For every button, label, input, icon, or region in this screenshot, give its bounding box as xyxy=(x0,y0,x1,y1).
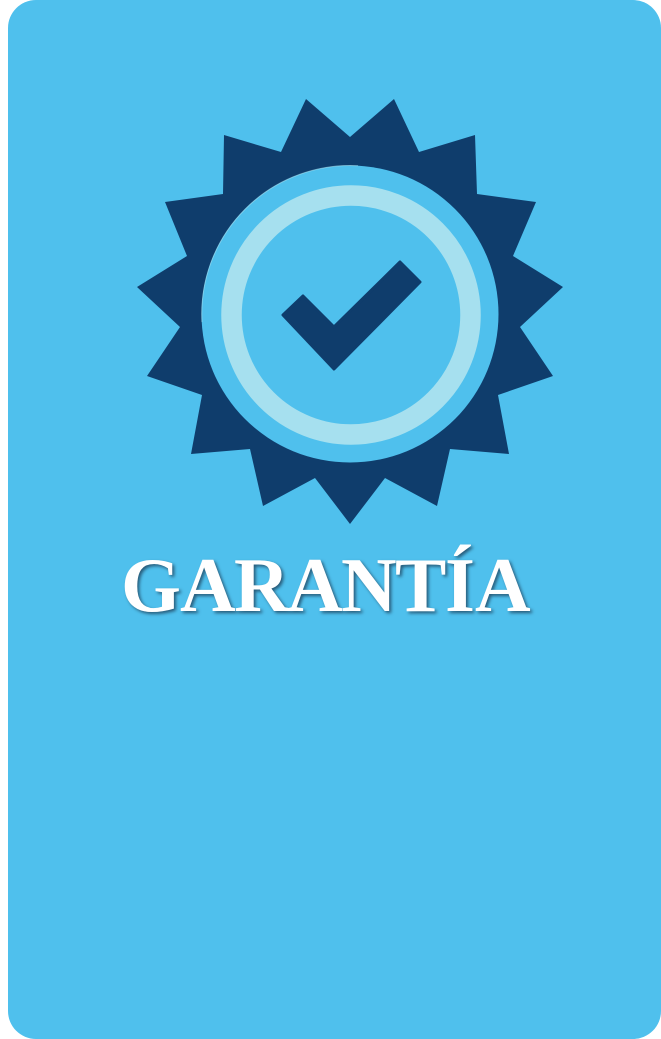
seal: disc highlight edge xyxy=(202,165,358,322)
seal: inner blue disc xyxy=(202,166,498,462)
seal: pale ring xyxy=(232,196,470,434)
title: GARANTÍA: GARANTÍA xyxy=(121,542,531,628)
icon: guarantee seal xyxy=(137,99,563,524)
icon: check mark xyxy=(283,262,420,369)
seal: dark starburst xyxy=(137,99,563,524)
